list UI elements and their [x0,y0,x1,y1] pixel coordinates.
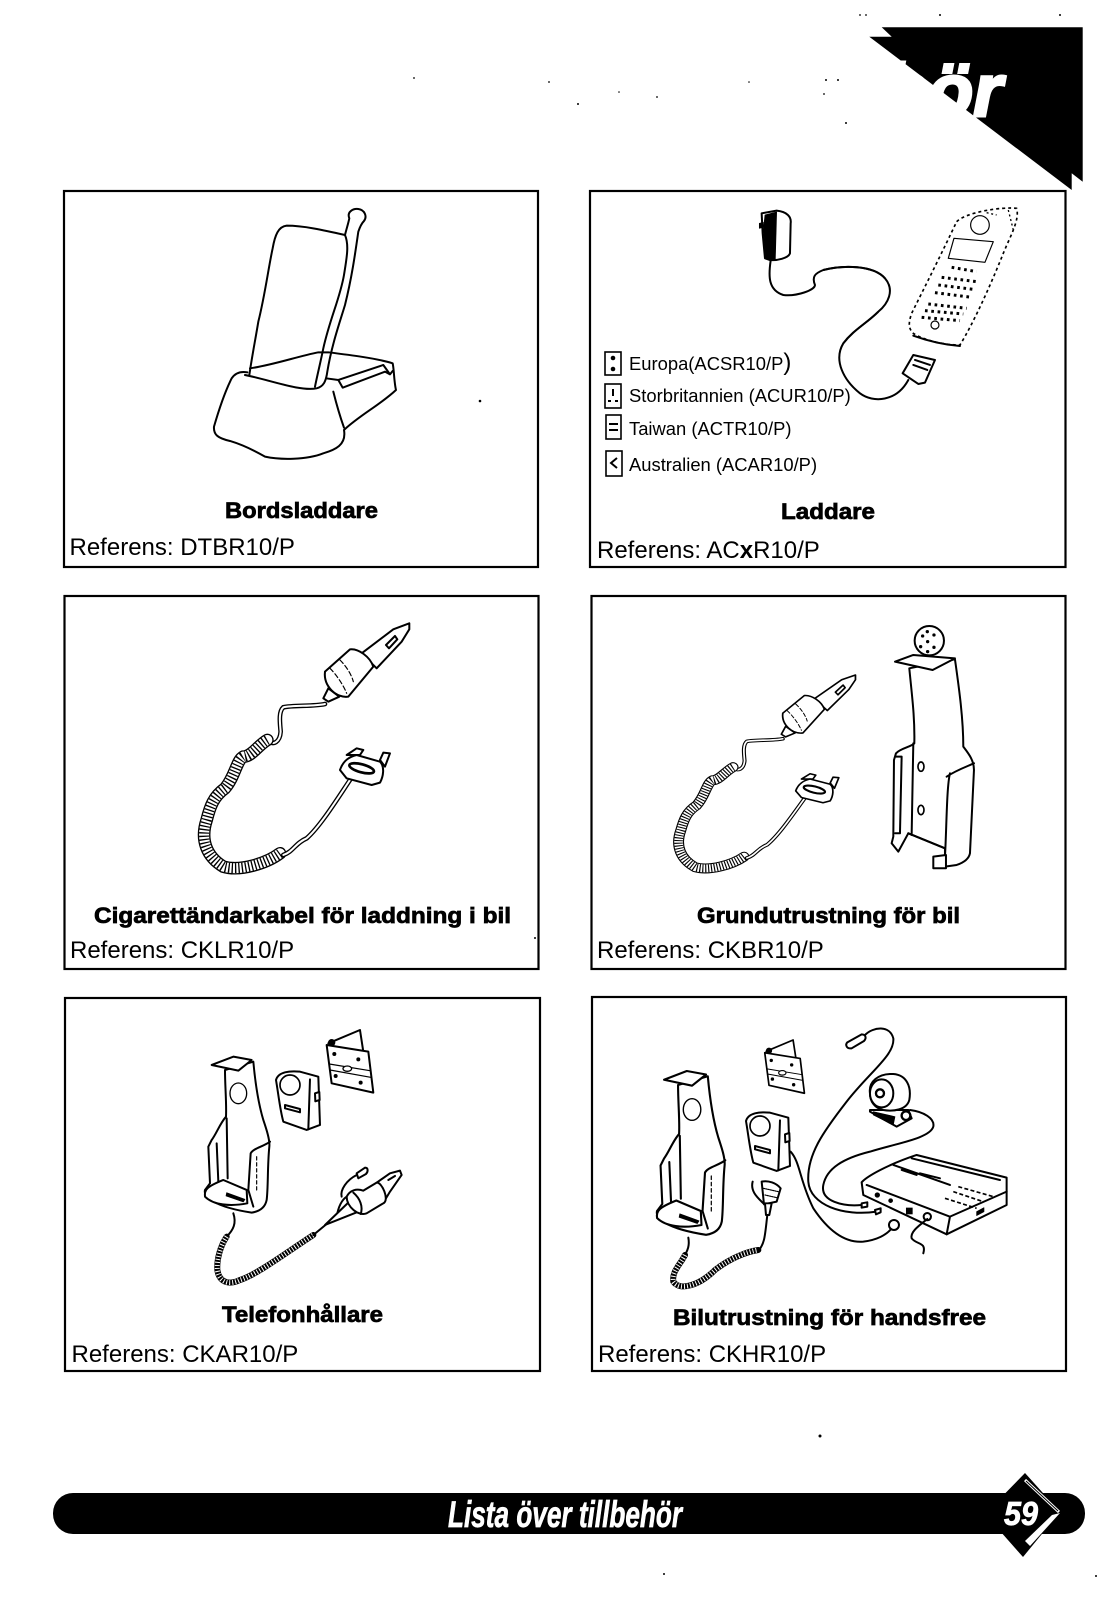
illustration: phone holder set [205,1030,402,1283]
footer title: Lista över tillbehör [448,1494,684,1535]
heading: Laddare [781,499,875,524]
label: Taiwan: Taiwan (ACTR10/P) [629,418,792,439]
icon: Australia socket [606,451,622,476]
icon: Taiwan socket [606,415,621,439]
illustration: car cable [204,623,409,868]
illustration: charger and phone [759,208,1017,399]
reference: Referens: ACxR10/P [597,537,820,564]
header: black corner triangle with cropped title: Tillbehör [691,49,1006,132]
scan specks [413,14,1097,1577]
heading: Bilutrustning för handsfree [673,1305,986,1330]
icon: UK socket [605,384,621,408]
illustration: receiver box [746,1112,790,1171]
heading: Bordsladdare [225,498,378,523]
icon: desktop charger [214,209,396,459]
reference: Referens: CKLR10/P [70,937,294,964]
reference: Referens: DTBR10/P [70,534,295,561]
label: Storbritannien: Storbritannien (ACUR10/P) [629,385,851,406]
page number diamond [985,1473,1060,1557]
heading: Cigarettändarkabel för laddning i bil [94,903,511,928]
illustration: car cable [679,675,855,868]
heading: Telefonhållare [222,1302,383,1327]
header: black corner triangle with cropped title [691,27,1083,190]
panel: Laddare [590,191,1066,567]
heading: Grundutrustning för bil [697,903,960,928]
label: Europa: Europa(ACSR10/P) [629,349,791,376]
page number: 59 [1004,1495,1039,1532]
label: Australien: Australien (ACAR10/P) [629,454,817,475]
reference: Referens: CKAR10/P [72,1341,298,1368]
panel: Bordsladdare [64,191,538,567]
panel: Bilutrustning för handsfree [592,997,1066,1371]
panel: Grundutrustning [592,596,1066,969]
illustration: phone holder [657,1071,725,1235]
illustration: bracket [765,1040,804,1093]
panel: Telefonhållare [65,998,540,1371]
reference: Referens: CKHR10/P [598,1341,826,1368]
icon: Europe socket [605,352,621,375]
panel: Cigarettändarkabel [64,596,538,969]
illustration: phone mount [892,626,974,868]
illustration: handsfree unit, microphone and speaker [673,1029,1007,1286]
footer bar [53,1473,1085,1557]
reference: Referens: CKBR10/P [597,937,824,964]
